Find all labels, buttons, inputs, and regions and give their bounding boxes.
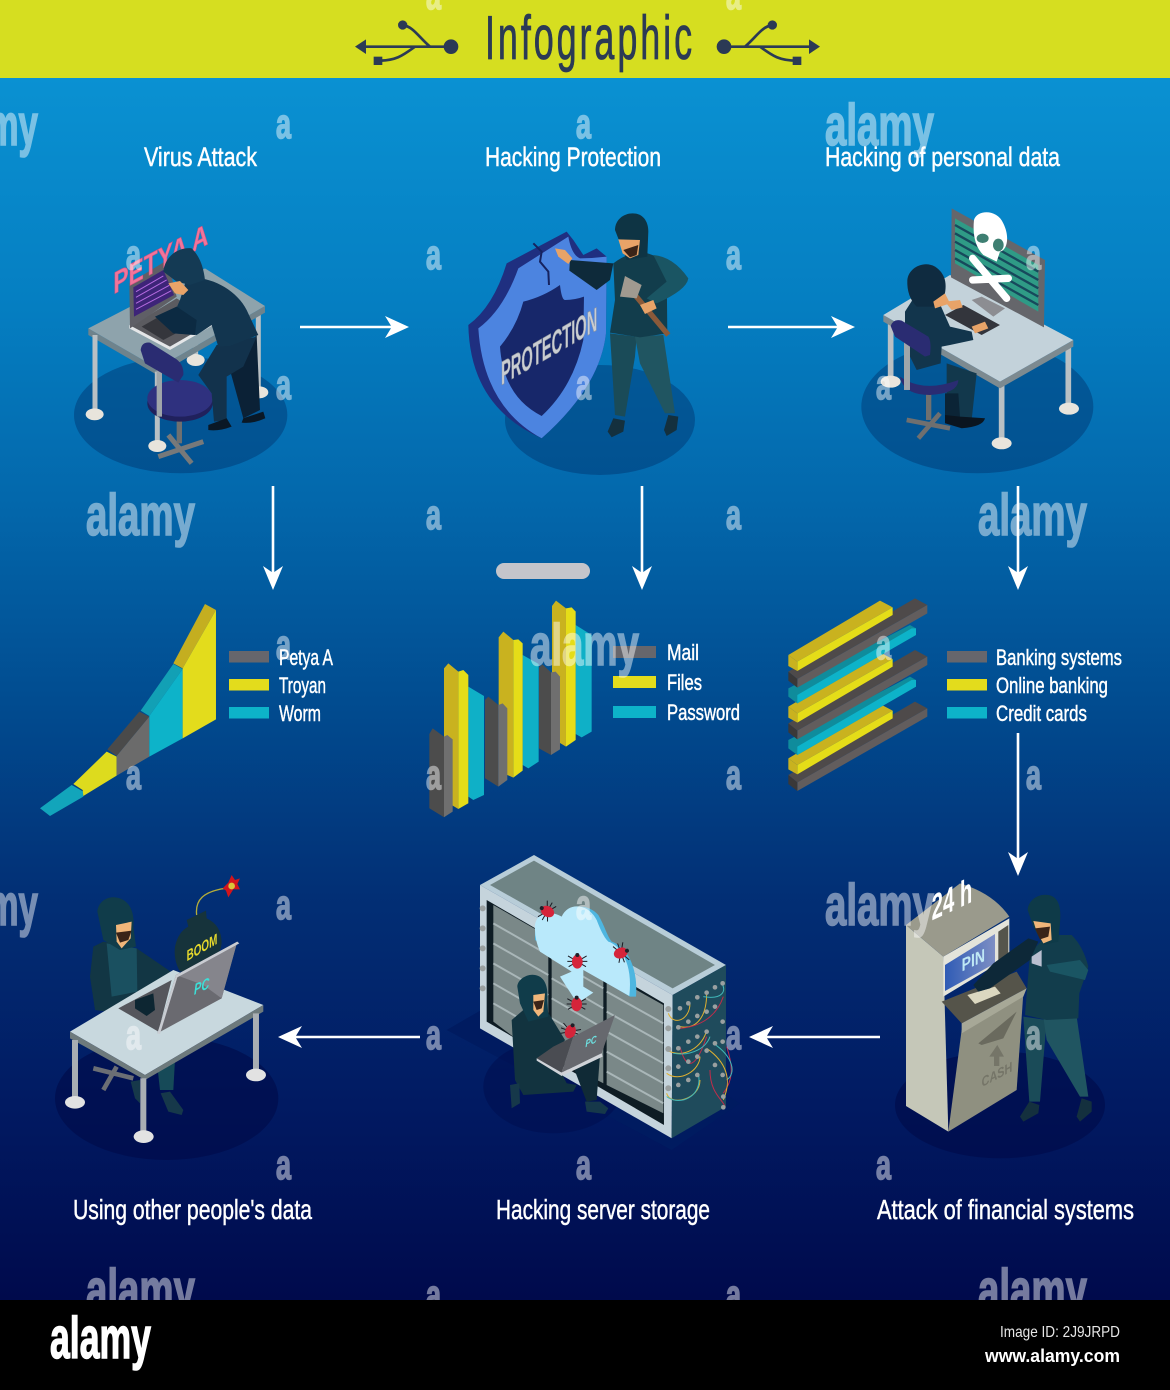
chart: area	[40, 604, 216, 816]
legend: banking	[947, 645, 1122, 726]
label: petya a: PETYA A	[113, 216, 208, 301]
scene: using other people's data	[55, 875, 278, 1160]
watermarks: a	[876, 361, 891, 408]
watermarks: a	[276, 1141, 291, 1188]
watermarks: alamy	[530, 613, 639, 678]
chart: bars	[429, 601, 592, 817]
watermarks: a	[726, 491, 741, 538]
footer bar	[0, 1300, 1170, 1390]
arrow	[632, 486, 652, 590]
image id: Image ID: 2J9JRPD	[1000, 1324, 1120, 1341]
cables	[480, 905, 732, 1110]
legend: banking: Credit cards	[996, 701, 1087, 726]
legend: banking: Banking systems	[996, 645, 1122, 670]
label: pc: PC	[585, 1033, 597, 1050]
watermarks: a	[726, 231, 741, 278]
watermarks: a	[576, 1141, 591, 1188]
watermarks: a	[426, 231, 441, 278]
hacker with hammer	[555, 213, 688, 437]
watermarks: a	[426, 1271, 441, 1318]
arrow	[1008, 486, 1028, 590]
watermarks: a	[126, 751, 141, 798]
arrow	[1008, 733, 1028, 876]
watermarks: a	[576, 100, 591, 147]
legend: virus types: Petya A	[279, 645, 333, 670]
arrow	[728, 316, 855, 338]
watermarks: a	[1026, 1011, 1041, 1058]
server rack	[480, 855, 726, 1138]
watermarks: a	[276, 621, 291, 668]
atm	[906, 883, 1027, 1132]
watermarks: a	[876, 621, 891, 668]
label: 24 h: 24 h	[932, 870, 972, 929]
watermarks: alamy	[86, 483, 195, 548]
watermarks: a	[126, 1011, 141, 1058]
label: cash: CASH	[982, 1059, 1012, 1091]
watermarks: alamy	[978, 483, 1087, 548]
arrow	[263, 486, 283, 590]
legend: data types: Files	[667, 670, 702, 695]
watermarks: alamy	[825, 93, 934, 158]
watermarks: a	[1026, 751, 1041, 798]
header band	[0, 0, 1170, 78]
watermarks: alamy	[825, 873, 934, 938]
pill decoration	[496, 563, 590, 579]
watermarks: a	[576, 361, 591, 408]
footer url: www.alamy.com	[984, 1346, 1120, 1366]
watermarks: a	[426, 1011, 441, 1058]
label: pin: PIN	[962, 946, 985, 976]
cloud	[535, 906, 636, 1003]
scene: virus attack	[74, 216, 287, 473]
watermarks: alamy	[86, 1258, 195, 1323]
watermarks: alamy	[978, 1258, 1087, 1323]
heading: hacking server storage: Hacking server storage	[496, 1194, 710, 1225]
office chair	[891, 320, 958, 438]
watermarks: a	[276, 361, 291, 408]
heading: hacking of personal data: Hacking of personal data	[825, 142, 1061, 172]
legend: data types: Mail	[667, 640, 699, 665]
legend: data types: Password	[667, 700, 740, 725]
icon: usb left	[355, 20, 458, 65]
watermarks: a	[276, 100, 291, 147]
laptop	[118, 942, 239, 1034]
watermarks: a	[726, 1011, 741, 1058]
watermarks: a	[276, 881, 291, 928]
shield	[468, 232, 607, 438]
heading: virus attack: Virus Attack	[144, 142, 257, 172]
monitor with skull	[951, 208, 1045, 327]
watermarks: a	[726, 751, 741, 798]
arrow	[749, 1026, 880, 1048]
footer logo: alamy	[50, 1306, 151, 1371]
watermarks: a	[726, 1271, 741, 1318]
scene: hacking server storage	[447, 855, 740, 1150]
label: boom: BOOM	[187, 930, 217, 965]
arrow	[278, 1026, 420, 1048]
hacker at laptop	[90, 897, 175, 1013]
heading: hacking protection: Hacking Protection	[485, 142, 661, 172]
scene: hacking protection: PROTECTION	[501, 299, 597, 393]
watermarks: a	[876, 1141, 891, 1188]
legend: virus types	[229, 645, 333, 726]
watermarks: a	[426, 751, 441, 798]
watermarks: a	[126, 231, 141, 278]
scene: hacking protection	[468, 213, 695, 475]
crouching hacker	[510, 975, 615, 1114]
watermarks: a	[1026, 231, 1041, 278]
chart: horizontal bars	[788, 598, 927, 791]
arrow	[300, 316, 409, 338]
atm hacker	[973, 895, 1092, 1122]
legend: virus types: Troyan	[279, 673, 326, 698]
heading: using other people's data: Using other people's data	[73, 1194, 312, 1225]
legend: data types	[613, 640, 740, 725]
seated hacker	[905, 264, 988, 428]
legend: banking: Online banking	[996, 673, 1108, 698]
title: Infographic	[485, 3, 692, 72]
watermarks: a	[426, 491, 441, 538]
scene: hacking of personal data	[861, 208, 1093, 473]
icon: usb right	[717, 20, 820, 65]
scene: attack of financial systems	[895, 870, 1105, 1158]
label: pc: PC	[194, 974, 210, 999]
watermarks: a	[576, 881, 591, 928]
legend: virus types: Worm	[279, 701, 321, 726]
bugs	[535, 899, 632, 1042]
bomb	[175, 875, 240, 972]
